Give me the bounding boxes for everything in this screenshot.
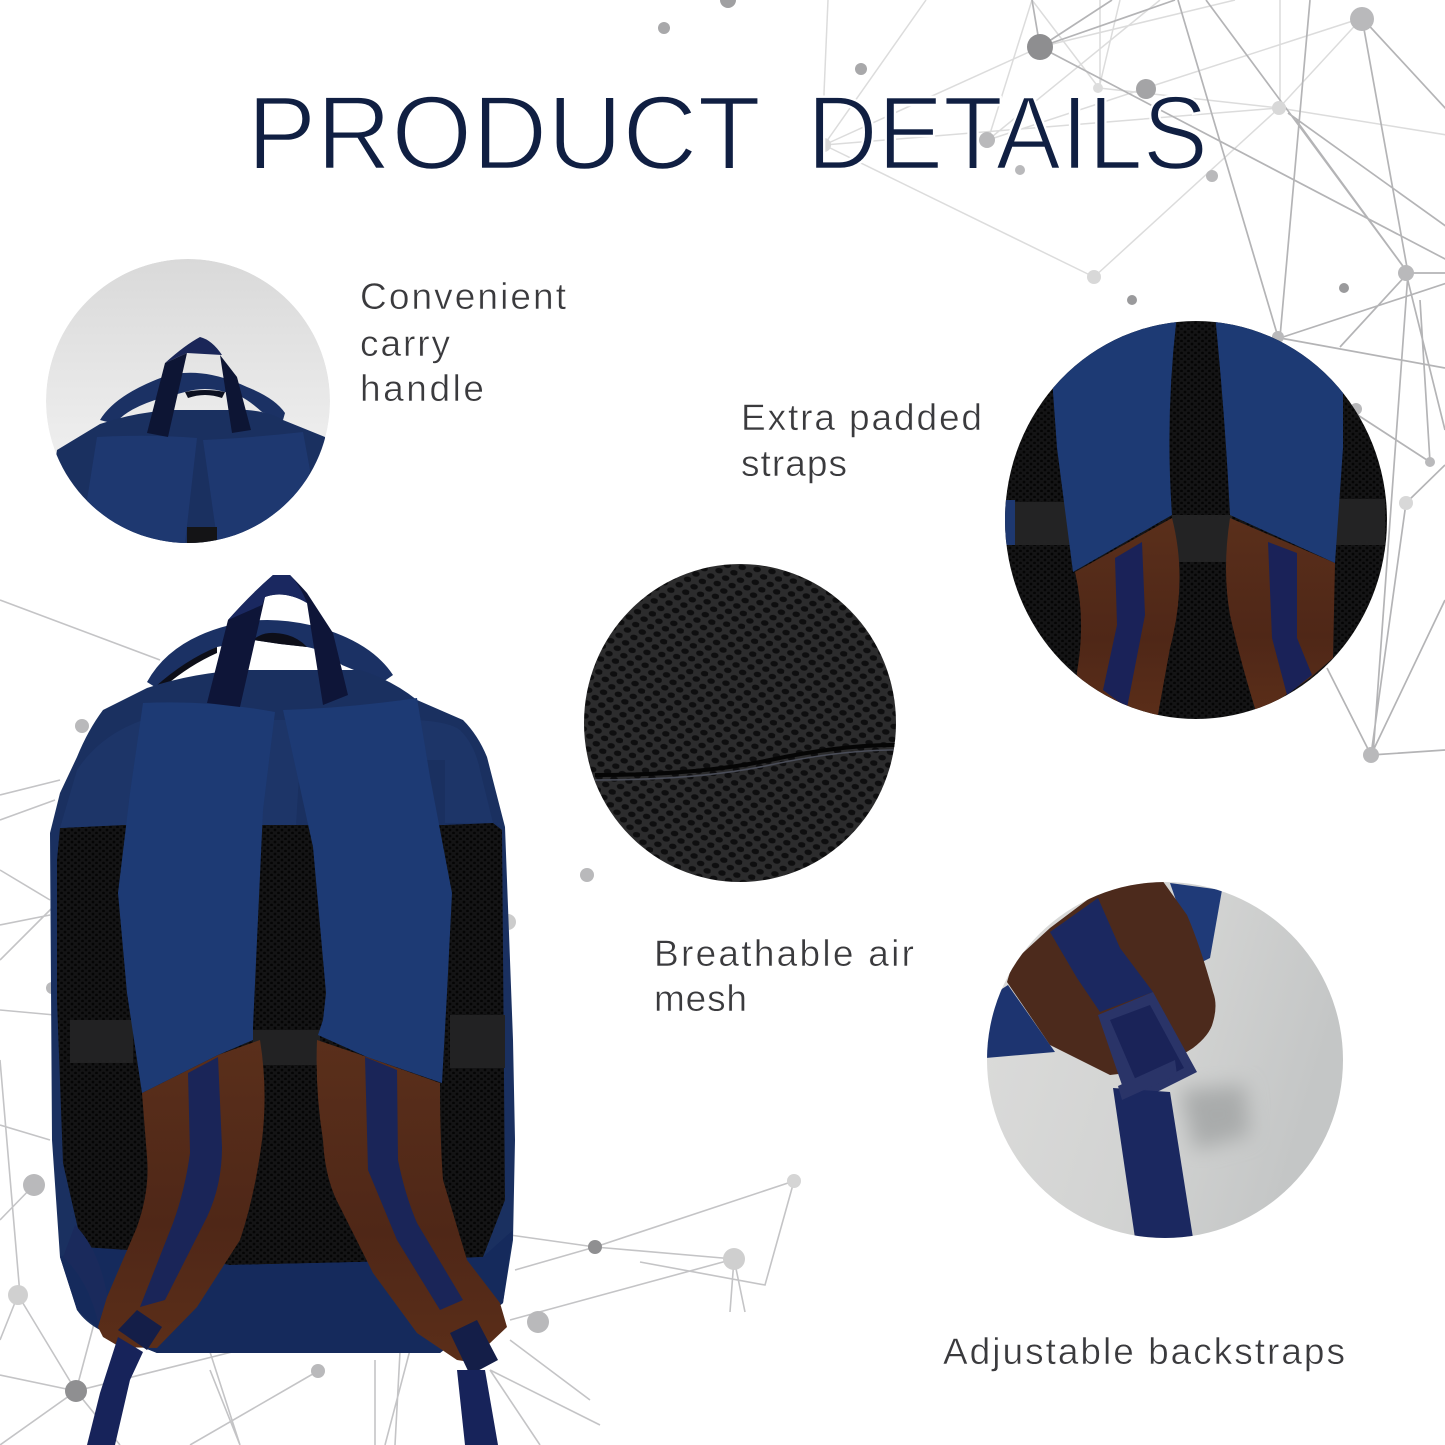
- label: adjustable backstraps: Adjustable backstraps: [943, 1331, 1345, 1372]
- carry loop: [165, 337, 222, 363]
- shoulder pads: [118, 702, 275, 1093]
- body: [56, 410, 326, 543]
- webbing bands: [70, 1015, 505, 1068]
- background network nodes: top right: [658, 0, 1435, 763]
- leather left: [98, 1040, 265, 1348]
- label: padded straps: Extra padded: [741, 397, 982, 438]
- buckle left: [118, 1310, 162, 1350]
- background network: top right: [824, 0, 1445, 755]
- background network: bottom left: [0, 600, 794, 1445]
- title: DETAILS: [807, 75, 1208, 192]
- pads: [86, 436, 197, 543]
- handle arc: [100, 373, 285, 424]
- top panel: [60, 720, 493, 828]
- side loop: [63, 1225, 108, 1322]
- label: carry handle: Convenient: [360, 276, 567, 317]
- carry loop: [207, 575, 348, 707]
- label: air mesh: Breathable air: [654, 933, 914, 974]
- label: padded straps: straps: [741, 443, 847, 484]
- label: carry handle: carry: [360, 323, 450, 364]
- label: carry handle: handle: [360, 368, 484, 409]
- photo: adjustable backstraps: [985, 880, 1345, 1240]
- photo: air mesh: [580, 560, 900, 885]
- webbing left: [140, 1057, 222, 1307]
- title: [247, 75, 1208, 192]
- photo: carry handle: [46, 259, 330, 543]
- photo: backpack: [50, 575, 515, 1445]
- backpack handle arc: [147, 620, 393, 687]
- photo: padded straps: [1000, 315, 1395, 725]
- label: carry handle: [360, 276, 567, 409]
- title: PRODUCT: [247, 75, 761, 192]
- label: air mesh: [654, 933, 914, 1019]
- webbing right: [365, 1057, 463, 1310]
- backpack body: [50, 670, 515, 1353]
- background network nodes: bottom left: [8, 719, 801, 1402]
- label: padded straps: [741, 397, 982, 484]
- bottom panel: [60, 1230, 513, 1353]
- label: air mesh: mesh: [654, 978, 747, 1019]
- leather right: [317, 1040, 507, 1362]
- buckle right: [450, 1320, 498, 1375]
- mesh back panel: [57, 823, 505, 1265]
